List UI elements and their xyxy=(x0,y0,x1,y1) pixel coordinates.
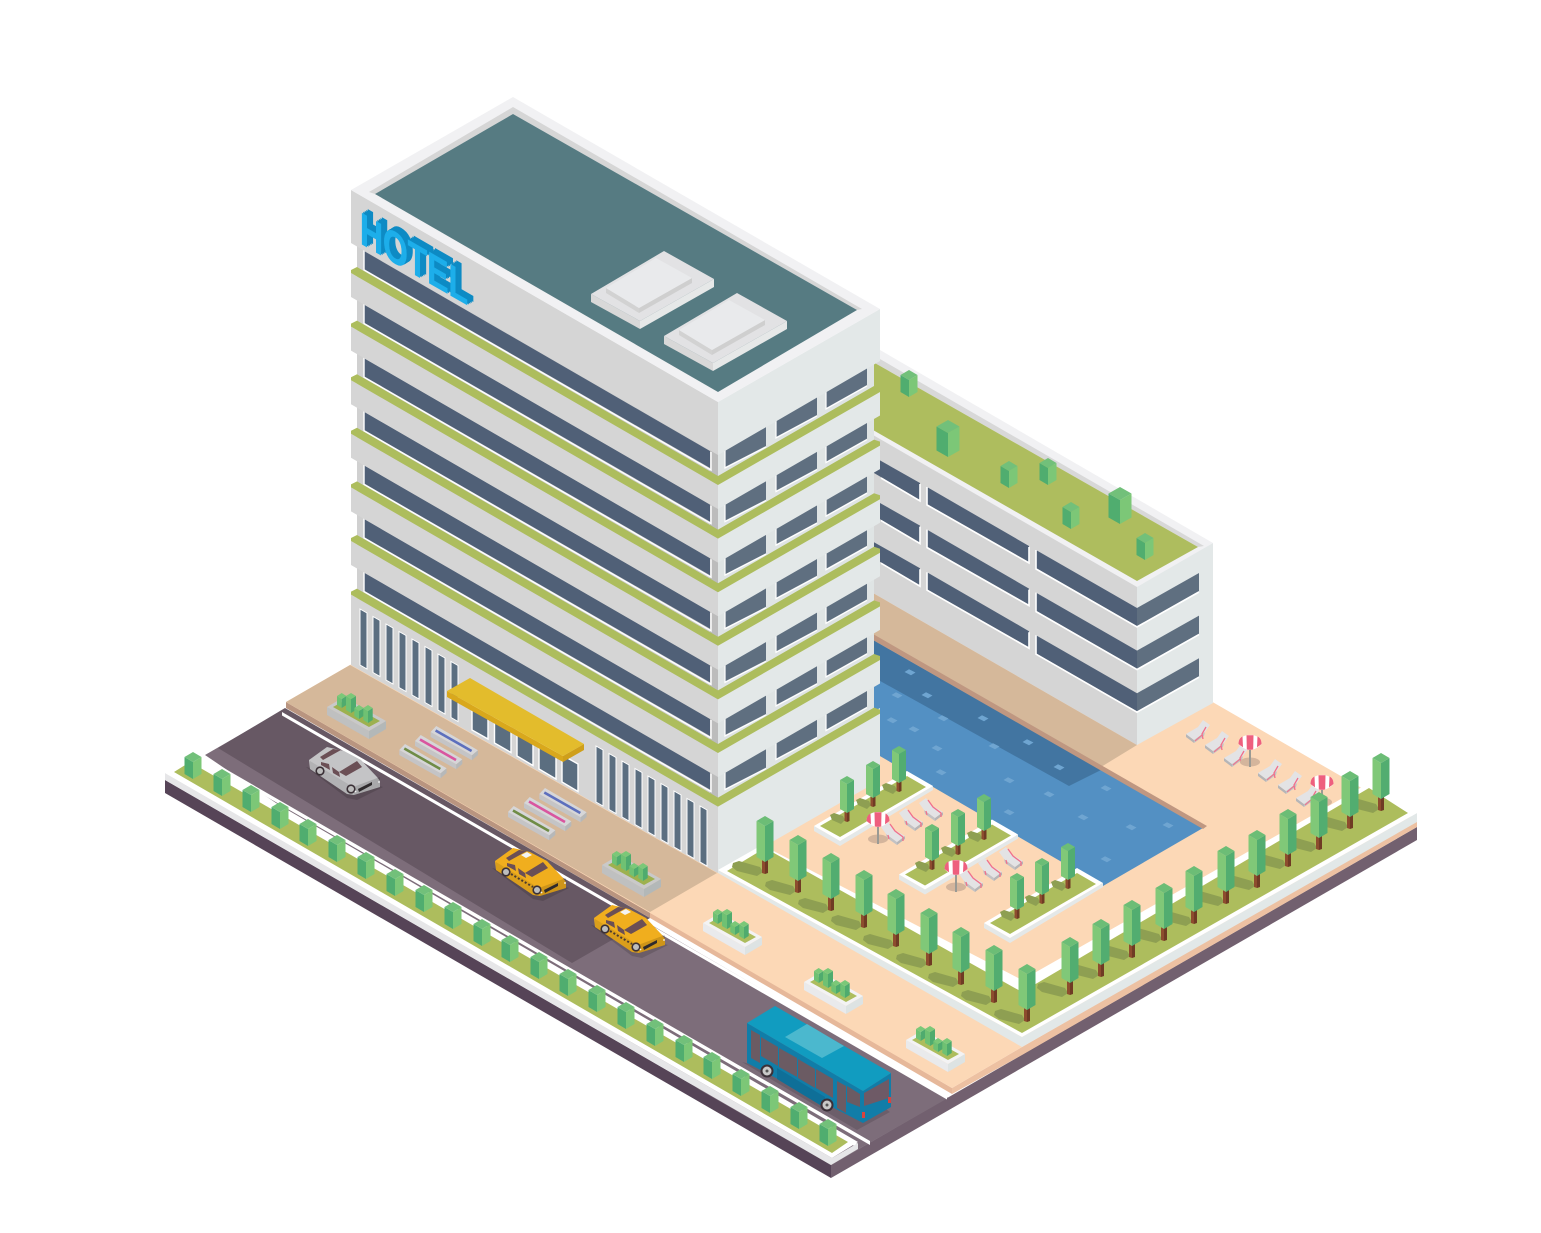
rooftop unit two xyxy=(664,293,787,371)
ground floor right windows xyxy=(596,746,707,866)
sun loungers xyxy=(881,720,1320,892)
platform base xyxy=(165,780,1417,1178)
shaded planter two xyxy=(602,851,661,897)
hotel sign: HOTEL xyxy=(366,200,474,312)
hotel sign: HOTEL xyxy=(363,201,471,314)
tower walls xyxy=(351,240,880,873)
low wing building with roof garden xyxy=(873,346,1213,745)
garden beds around courtyard xyxy=(718,783,1417,1047)
pavement and courtyard ground xyxy=(286,363,1417,1094)
guest room floors xyxy=(351,250,880,831)
hotel sign: HOTEL xyxy=(360,203,468,316)
blue bus xyxy=(742,1006,891,1130)
parapet and rooftop xyxy=(351,97,880,455)
tree row left branch xyxy=(732,816,1036,1024)
ground floor left windows xyxy=(360,609,458,722)
hotel sign: HOTEL xyxy=(364,201,472,313)
courtyard bed one with trees xyxy=(814,746,933,846)
courtyard bed three with trees xyxy=(984,843,1103,943)
shaded planter one xyxy=(327,693,386,739)
entrance glass doors xyxy=(472,705,578,792)
road xyxy=(203,708,948,1165)
hotel tower xyxy=(351,97,880,873)
flower strips by right windows xyxy=(508,788,587,840)
swimming pool xyxy=(873,593,1207,886)
rooftop unit one xyxy=(591,251,714,329)
silver car xyxy=(306,747,383,800)
pavement planters xyxy=(703,909,965,1072)
hotel sign: HOTEL xyxy=(362,202,469,315)
courtyard bed two with trees xyxy=(899,794,1018,894)
hotel sign xyxy=(360,200,474,316)
tree row right branch xyxy=(1037,753,1390,997)
taxi two xyxy=(591,905,668,958)
flower strips by entrance xyxy=(399,726,478,778)
beach umbrellas xyxy=(866,735,1334,892)
median strip with bushes xyxy=(165,752,858,1165)
taxi one xyxy=(492,848,569,901)
yellow entrance canopy xyxy=(447,678,584,762)
